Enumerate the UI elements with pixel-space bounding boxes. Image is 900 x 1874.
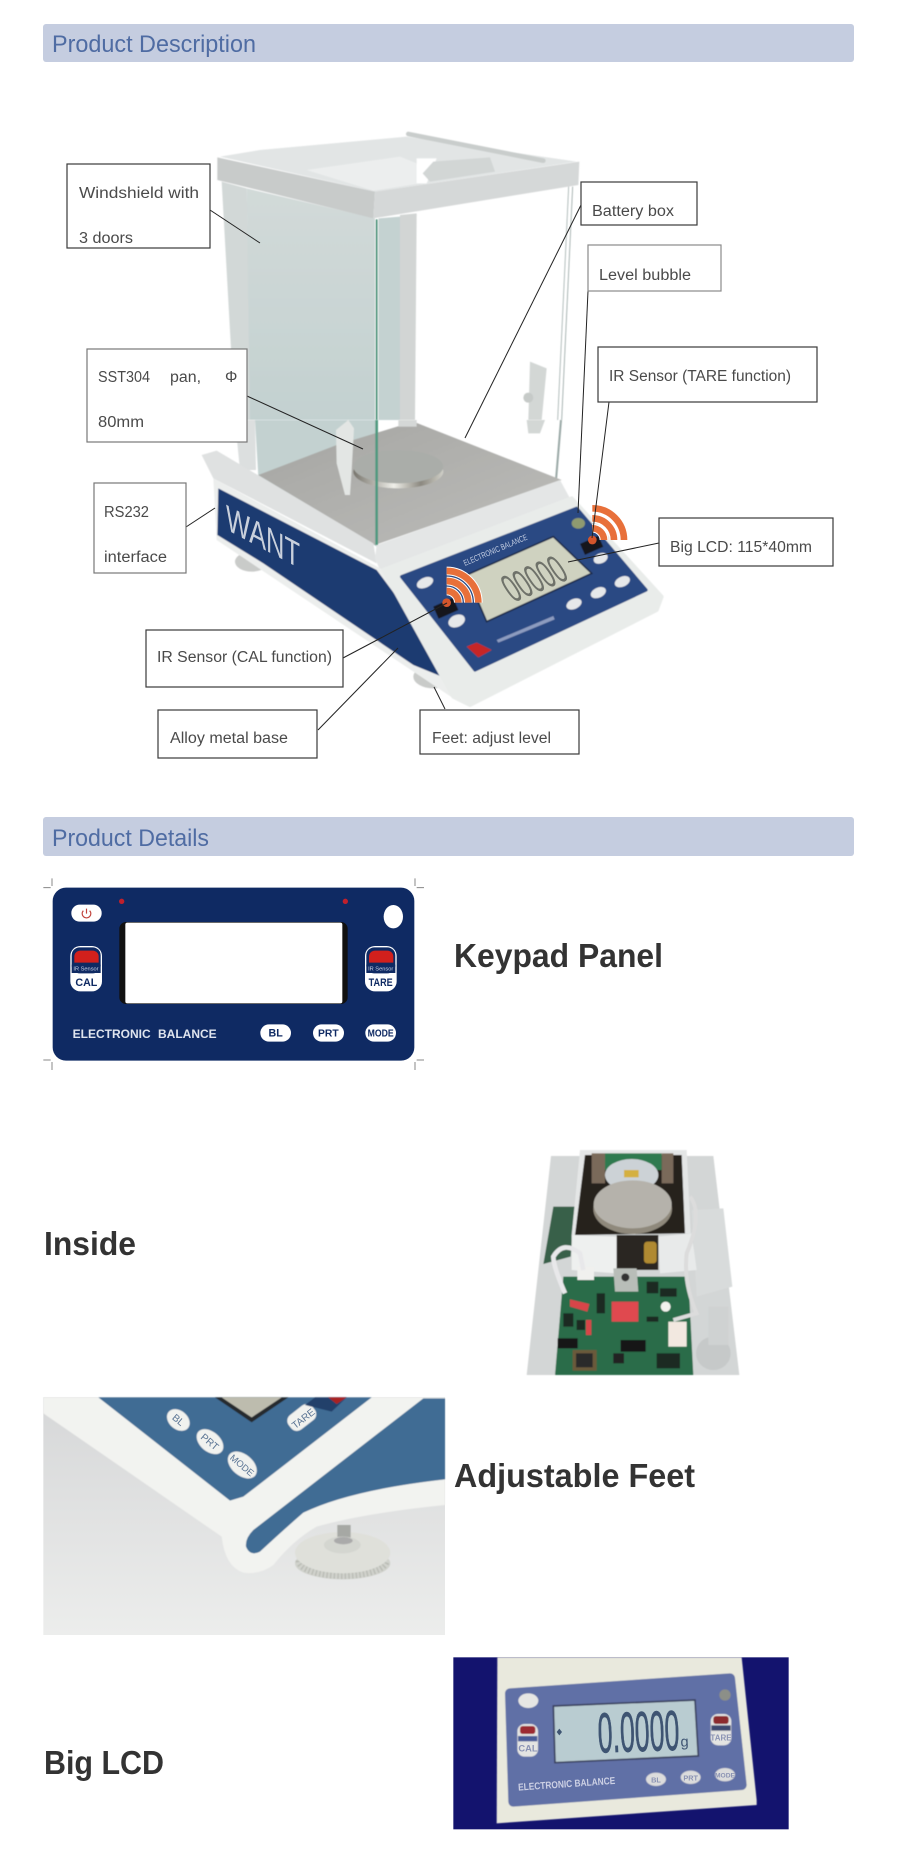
keypad label: ELECTRONIC BALANCE	[73, 1027, 217, 1041]
button: BL: BL	[269, 1028, 283, 1040]
icon: IR signal CAL	[442, 571, 478, 607]
button: PRT	[313, 1024, 344, 1042]
heading: Keypad Panel: Keypad Panel	[454, 937, 663, 974]
photo: windshield upper part	[217, 134, 579, 420]
panel label: ELECTRONIC BALANCE	[518, 1776, 616, 1794]
callout: feet: Feet: adjust level	[432, 730, 551, 747]
icon: power button	[71, 905, 102, 922]
callout: SST304 pan: pan,	[170, 369, 201, 386]
callout: RS232 interface	[94, 483, 186, 573]
callout: SST304 pan: Φ	[225, 369, 237, 386]
button: PRT: PRT	[318, 1029, 339, 1040]
LCD window	[119, 922, 348, 1004]
button: MODE: MODE	[368, 1029, 394, 1040]
icon: IR signal TARE	[588, 508, 624, 544]
keypad panel artwork	[43, 878, 424, 1070]
callout: SST304 pan: 80mm	[98, 414, 144, 431]
heading: Adjustable Feet: Adjustable Feet	[454, 1457, 695, 1494]
callout: big LCD: Big LCD: 115*40mm	[670, 539, 812, 556]
keypad text	[518, 1734, 736, 1784]
callout: level bubble	[588, 245, 721, 291]
button: TARE: TARE	[369, 977, 393, 989]
keypad text: CAL	[518, 1743, 538, 1753]
callout: IR sensor CAL: IR Sensor (CAL function)	[157, 649, 332, 666]
callout: feet	[420, 710, 579, 754]
section heading: Product Description: Product Description	[52, 31, 256, 58]
callout: windshield: 3 doors	[79, 230, 133, 247]
callout: big LCD	[659, 518, 833, 566]
button: MODE	[365, 1024, 396, 1042]
brand lettering: WANT	[226, 498, 300, 577]
LCD reading: 0.0000	[597, 1700, 680, 1766]
callout: IR sensor CAL	[146, 630, 343, 687]
LCD reading	[557, 1700, 689, 1766]
keypad text: MODE	[715, 1772, 736, 1779]
callout: windshield: Windshield with	[79, 185, 199, 202]
callout: RS232 interface: RS232	[104, 504, 149, 521]
keypad text: PRT	[683, 1773, 699, 1782]
photo: adjustable foot close-up	[43, 1397, 445, 1635]
keypad text: TARE	[710, 1734, 732, 1743]
foot disc	[295, 1525, 390, 1579]
callout: level bubble: Level bubble	[599, 267, 691, 284]
callout: alloy metal base: Alloy metal base	[170, 730, 288, 747]
callout: RS232 interface: interface	[104, 549, 167, 566]
photo: balance base with keypad	[202, 420, 662, 705]
section heading: Product Details	[43, 817, 854, 856]
callout: alloy metal base	[158, 710, 317, 758]
button: TARE: IR Sensor	[368, 967, 393, 973]
heading: Big LCD: Big LCD	[44, 1744, 164, 1781]
LCD digits: 00000	[492, 547, 576, 610]
keypad lettering: ELECTRONIC BALANCE	[462, 532, 529, 568]
heading: Inside: Inside	[44, 1225, 136, 1262]
button: CAL	[70, 946, 102, 991]
button labels: TARE	[290, 1407, 318, 1432]
LCD reading: g	[680, 1734, 689, 1751]
photo: inside of the balance	[527, 1150, 739, 1375]
leader lines	[186, 205, 659, 730]
callout: battery box	[581, 182, 697, 225]
section heading: Product Description	[43, 24, 854, 62]
keypad text: BL	[651, 1775, 661, 1784]
photo: big LCD close-up	[453, 1657, 789, 1829]
button labels: MODE	[228, 1453, 256, 1478]
section heading: Product Details: Product Details	[52, 825, 209, 852]
diagram: annotated balance	[67, 134, 833, 758]
button labels: PRT	[198, 1432, 220, 1453]
callout: IR sensor TARE: IR Sensor (TARE function)	[609, 368, 791, 385]
button: CAL: CAL	[75, 977, 98, 989]
button: TARE	[365, 946, 397, 991]
keypad buttons	[163, 1401, 319, 1484]
callout: battery box: Battery box	[592, 203, 674, 220]
callout: IR sensor TARE	[598, 347, 817, 402]
button labels: BL	[170, 1412, 186, 1429]
button: CAL: IR Sensor	[73, 967, 99, 973]
callout: windshield	[67, 164, 210, 248]
button labels	[170, 1407, 318, 1478]
callout: SST304 pan	[87, 349, 247, 442]
button: BL	[260, 1024, 291, 1042]
callout: SST304 pan: SST304	[98, 369, 150, 386]
